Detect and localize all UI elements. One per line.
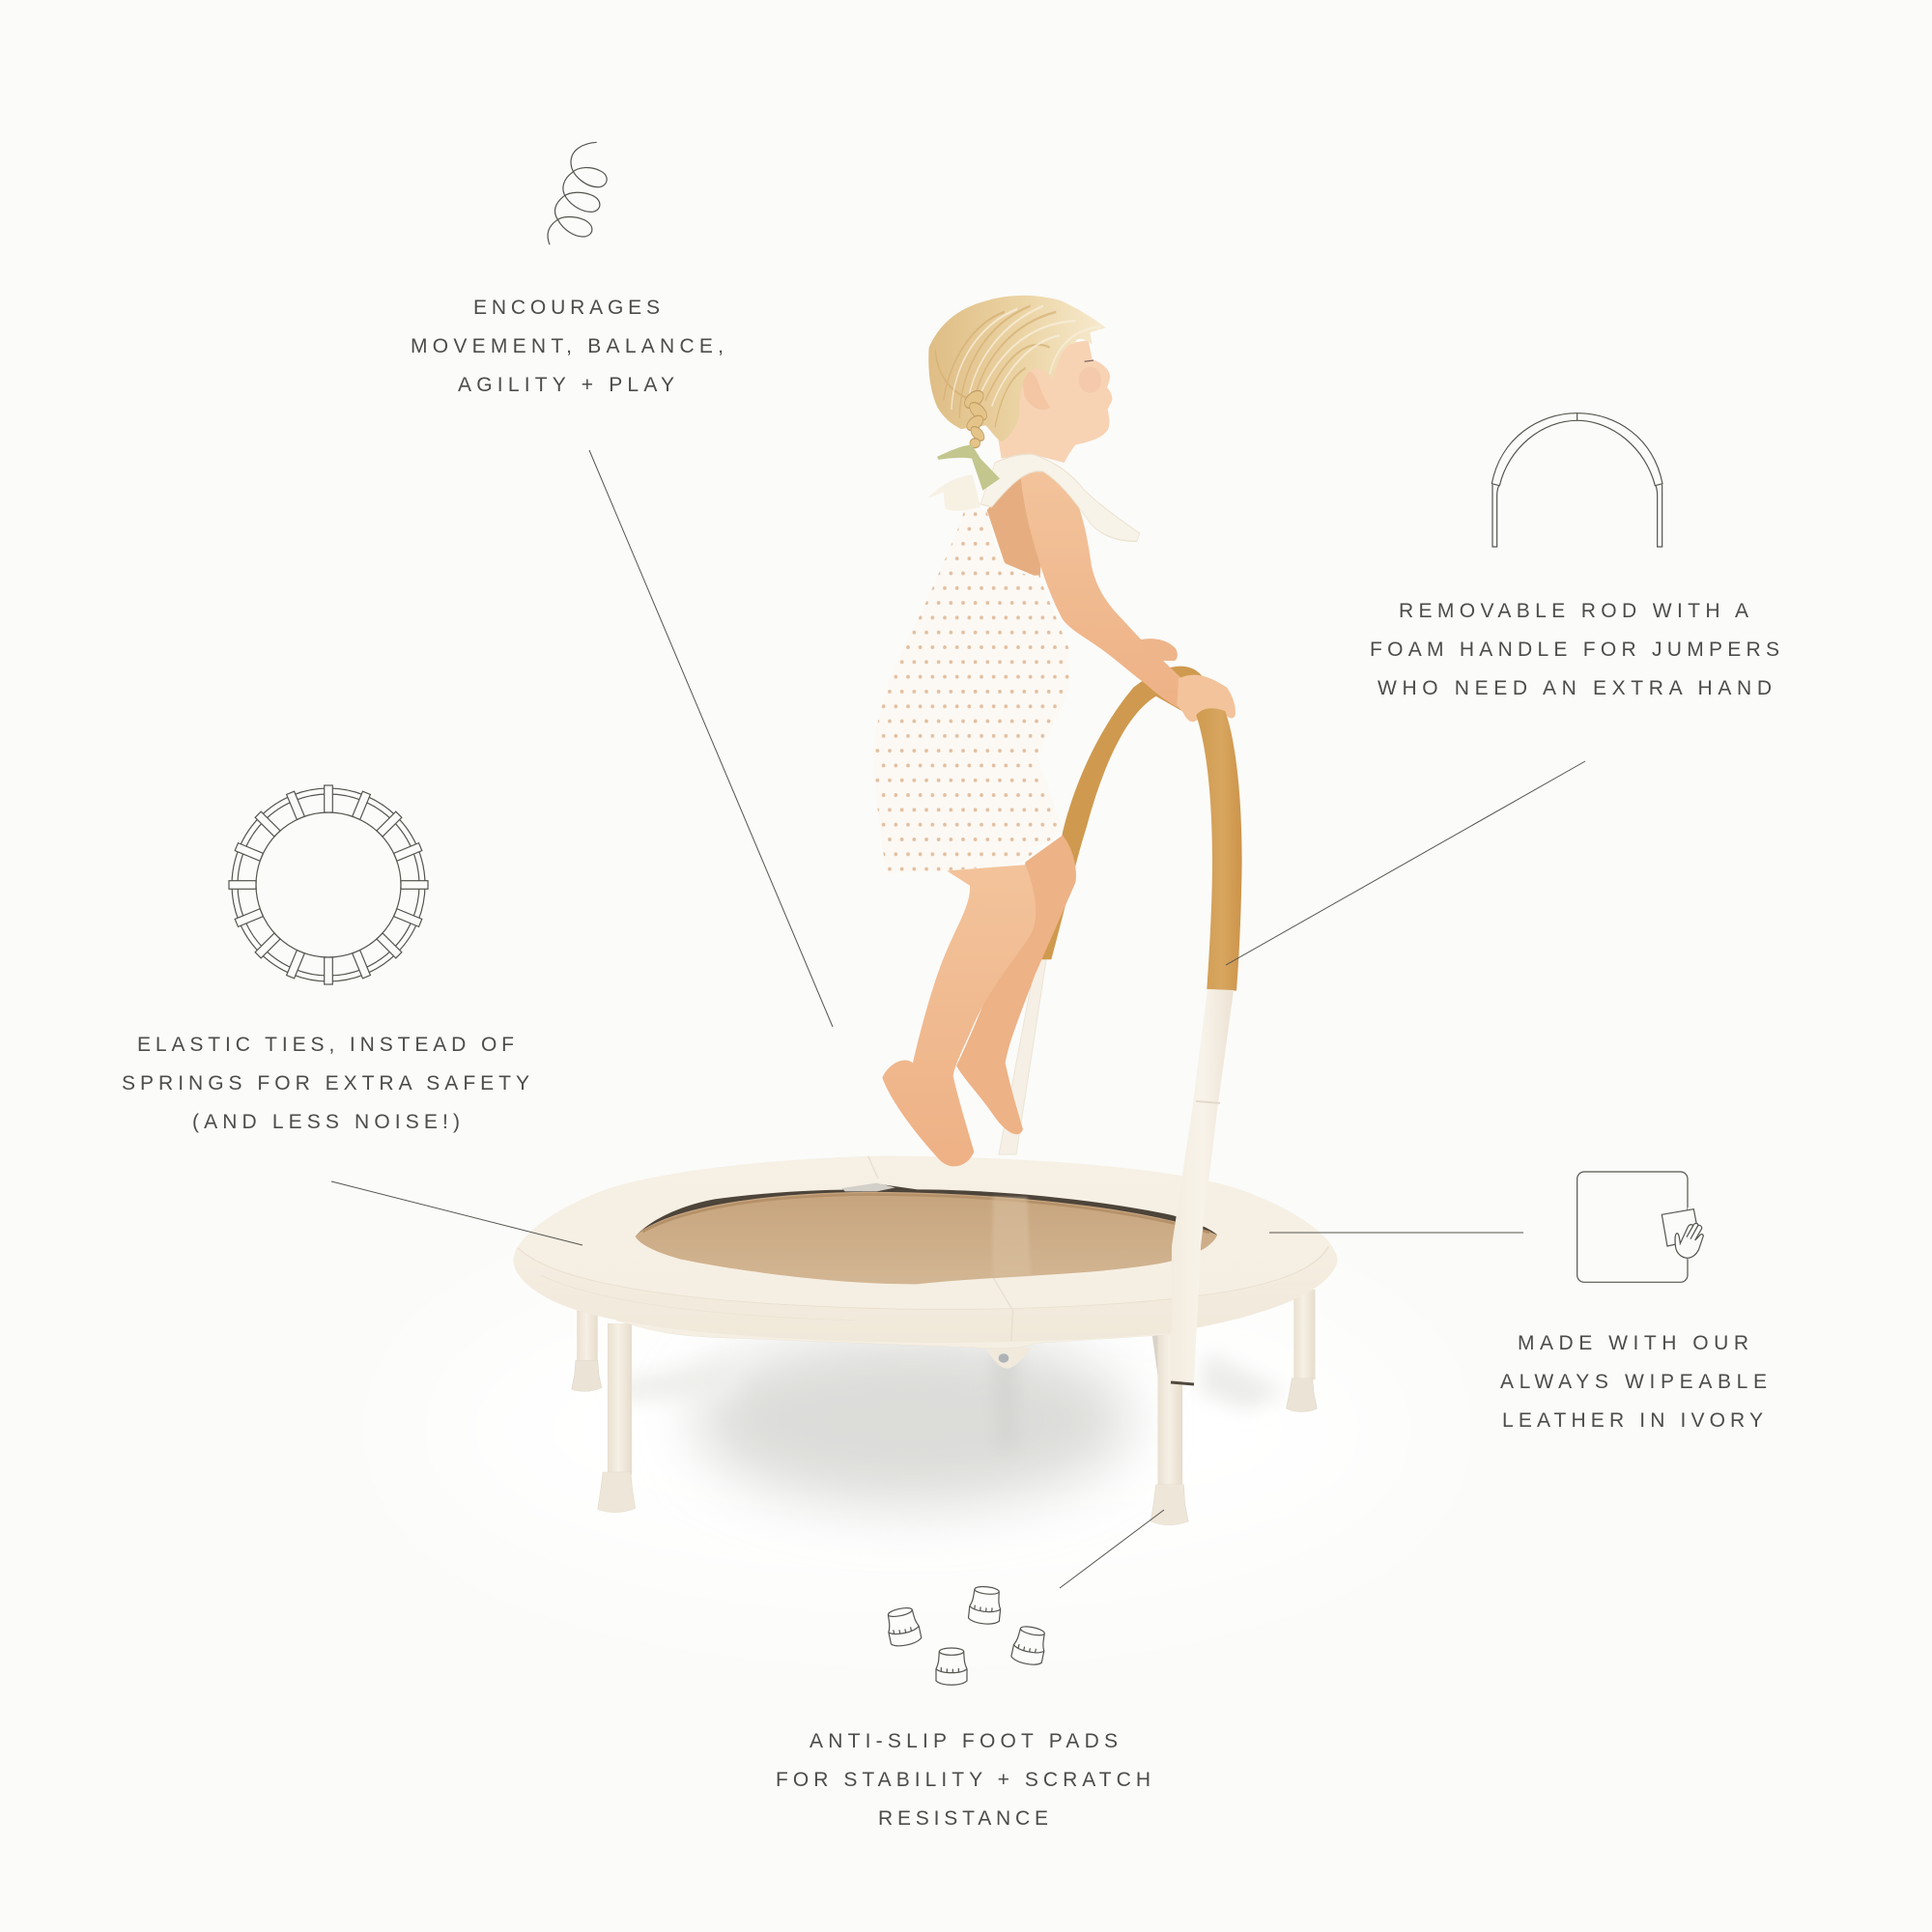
rod joint <box>1171 1101 1220 1384</box>
front right leg <box>1151 1333 1188 1525</box>
back right leg <box>1287 1290 1317 1412</box>
text: leather: LEATHER IN IVORY <box>1502 1409 1763 1432</box>
photo: trampoline with child <box>415 296 1420 1594</box>
near hand <box>1177 675 1236 722</box>
front left leg <box>598 1323 636 1513</box>
mat highlight <box>993 1196 1031 1277</box>
metal bracket <box>1151 1333 1172 1384</box>
floor glow and shadow <box>415 1265 1420 1594</box>
text: movement: AGILITY + PLAY <box>458 374 674 396</box>
text: leather: MADE WITH OUR <box>1518 1332 1748 1354</box>
pad top <box>968 1585 1003 1625</box>
leader line: movement <box>589 450 833 1027</box>
lace collar strap <box>980 454 1140 541</box>
pad bottom <box>936 1648 967 1685</box>
lace collar left <box>927 474 980 511</box>
text: rod <box>1370 600 1779 699</box>
leader line: rod <box>1226 761 1585 965</box>
back handle rod (white) <box>999 956 1046 1154</box>
text: movement: MOVEMENT, BALANCE, <box>411 335 724 357</box>
text: movement: ENCOURAGES <box>473 297 660 319</box>
text: elastic ties: SPRINGS FOR EXTRA SAFETY <box>122 1072 529 1094</box>
back foam handle <box>1037 667 1205 959</box>
pad side band <box>514 1246 1337 1343</box>
icon: elastic ring <box>229 785 428 984</box>
text: foot pads: FOR STABILITY + SCRATCH <box>776 1769 1151 1791</box>
leader line: leather <box>1269 1232 1523 1234</box>
cheek <box>1079 367 1101 393</box>
text: rod: FOAM HANDLE FOR JUMPERS <box>1370 639 1779 661</box>
leader line: foot pads <box>1060 1510 1164 1588</box>
arm <box>1021 471 1185 711</box>
eyelet <box>985 1348 1032 1369</box>
text: elastic ties: ELASTIC TIES, INSTEAD OF <box>137 1034 514 1056</box>
text: leather: ALWAYS WIPEABLE <box>1500 1371 1767 1393</box>
icon: wipe panel with hand <box>1577 1172 1703 1282</box>
text: movement <box>411 297 724 396</box>
ribbon <box>937 445 1000 491</box>
child and back foam <box>872 296 1242 1166</box>
ear <box>1022 371 1050 410</box>
pad underskirt <box>616 1304 1169 1349</box>
front leg <box>882 865 1036 1166</box>
front rod (white) <box>1171 989 1234 1382</box>
rear leg <box>956 836 1076 1134</box>
closed eye <box>1085 360 1094 361</box>
pad seams <box>518 1156 1328 1341</box>
mat <box>636 1192 1217 1284</box>
neck and face <box>998 340 1112 463</box>
hair strands <box>935 306 1101 427</box>
mat gap shadow <box>636 1183 1217 1236</box>
text: elastic ties: (AND LESS NOISE!) <box>192 1111 460 1133</box>
leader line: elastic ties <box>331 1181 582 1245</box>
back left leg <box>572 1311 602 1391</box>
braid <box>964 387 988 448</box>
hair <box>928 296 1106 442</box>
torso skin <box>987 474 1043 578</box>
front foam handle <box>1196 708 1242 991</box>
text: rod: WHO NEED AN EXTRA HAND <box>1378 677 1772 699</box>
metal clip <box>842 1183 895 1191</box>
icon: spring <box>548 142 607 244</box>
icon: arch rod <box>1492 413 1662 547</box>
leather pad <box>513 1156 1337 1343</box>
text: foot pads: RESISTANCE <box>878 1807 1048 1830</box>
trampoline base <box>513 1156 1337 1525</box>
text: foot pads: ANTI-SLIP FOOT PADS <box>810 1730 1118 1752</box>
icon: foot pads <box>884 1585 1048 1685</box>
text: rod: REMOVABLE ROD WITH A <box>1399 600 1748 622</box>
far hand <box>1140 639 1178 661</box>
pad left <box>884 1605 923 1648</box>
pad right <box>1010 1624 1048 1666</box>
text: elastic ties <box>122 1034 529 1133</box>
text: foot pads <box>776 1730 1151 1830</box>
dress <box>872 510 1069 873</box>
mat rim <box>642 1195 1209 1233</box>
text: leather <box>1500 1332 1767 1432</box>
